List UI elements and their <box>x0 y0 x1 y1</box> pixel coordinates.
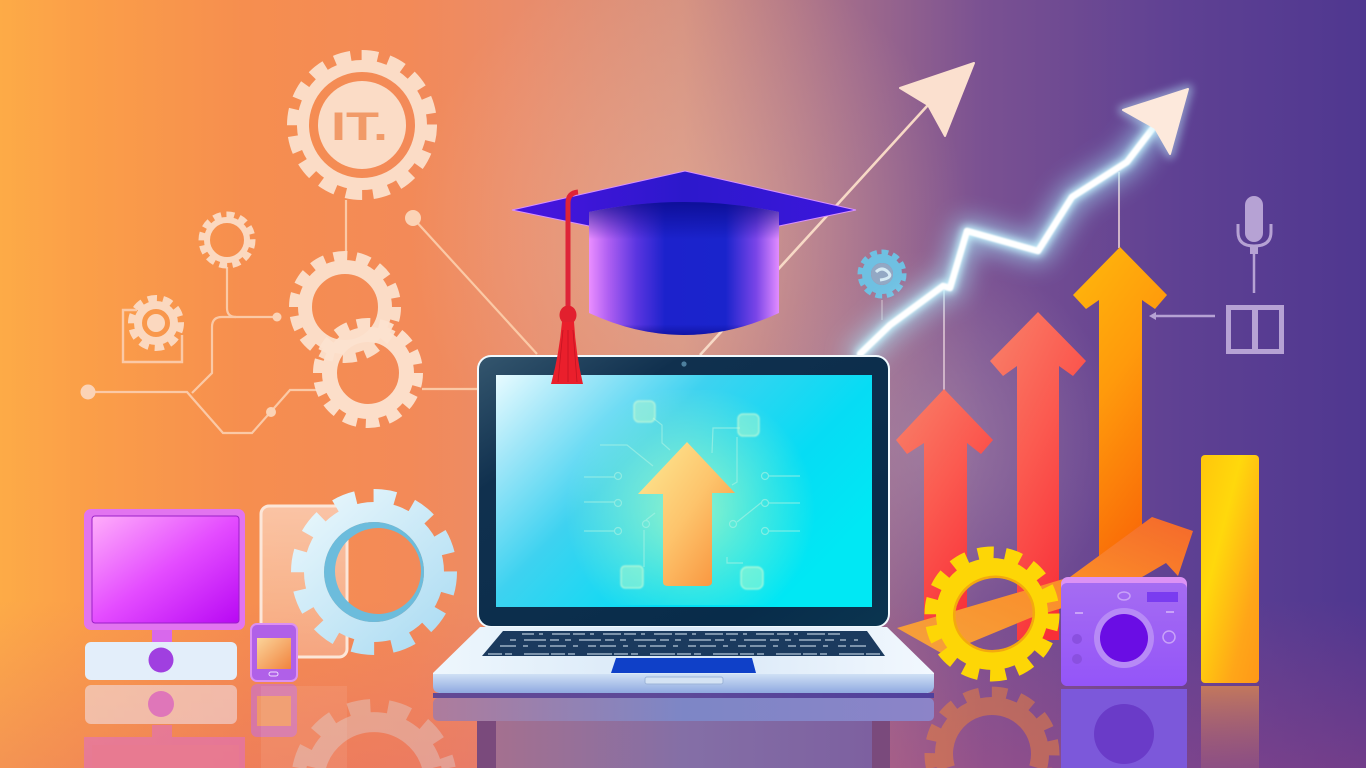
lower gear <box>318 324 418 422</box>
orange arrow three <box>1073 247 1167 570</box>
left circuit lines <box>88 200 537 433</box>
cap board <box>512 171 856 226</box>
reflection: laptop <box>433 693 934 768</box>
tassel <box>551 192 583 384</box>
background glow behind arrows <box>740 250 1120 630</box>
circuit nodes <box>80 210 421 417</box>
upload arrow on display <box>638 442 735 586</box>
webcam <box>681 361 687 367</box>
purple camera device <box>1061 577 1187 686</box>
red arrow one <box>896 389 993 640</box>
yellow cylinder <box>1201 455 1259 683</box>
circuit traces on display <box>584 418 800 567</box>
left monitor <box>84 509 245 680</box>
small gear <box>202 214 252 266</box>
yellow gear <box>931 553 1053 675</box>
glowing trend line <box>860 89 1188 354</box>
laptop screen lid <box>477 355 890 628</box>
light blue gear <box>298 496 450 648</box>
icon: microphone <box>1238 196 1271 293</box>
trackpad <box>611 658 756 673</box>
laptop <box>433 355 934 693</box>
floor tint <box>0 600 1366 768</box>
latch <box>645 677 723 684</box>
icon: gear in box <box>123 298 182 362</box>
background centre glow <box>400 0 980 510</box>
reflection: cylinder <box>1201 686 1259 768</box>
phone <box>251 624 297 681</box>
blue small gear <box>860 252 904 320</box>
thin arrow: growth line <box>700 63 974 355</box>
deck front edge <box>433 674 934 693</box>
connector lines above arrows <box>944 172 1119 390</box>
hinge and deck <box>433 627 934 693</box>
diagonal orange arrow <box>897 517 1193 654</box>
keyboard keys <box>488 634 882 654</box>
IT gear <box>292 56 432 194</box>
keyboard <box>482 631 885 656</box>
glowing app icons on display <box>621 401 763 589</box>
icon: window panel with arrow <box>1149 307 1282 352</box>
red arrow two <box>990 312 1086 640</box>
graduation cap <box>512 171 856 335</box>
reflection: light gear <box>299 706 449 768</box>
translucent panel behind gear <box>261 506 347 657</box>
cap body <box>589 202 779 335</box>
reflection: yellow gear <box>931 693 1053 768</box>
middle gear <box>294 256 396 358</box>
laptop display <box>496 375 872 607</box>
IT gear: IT. <box>331 105 388 149</box>
reflection: camera <box>1061 689 1187 768</box>
reflection: left devices <box>84 684 347 768</box>
